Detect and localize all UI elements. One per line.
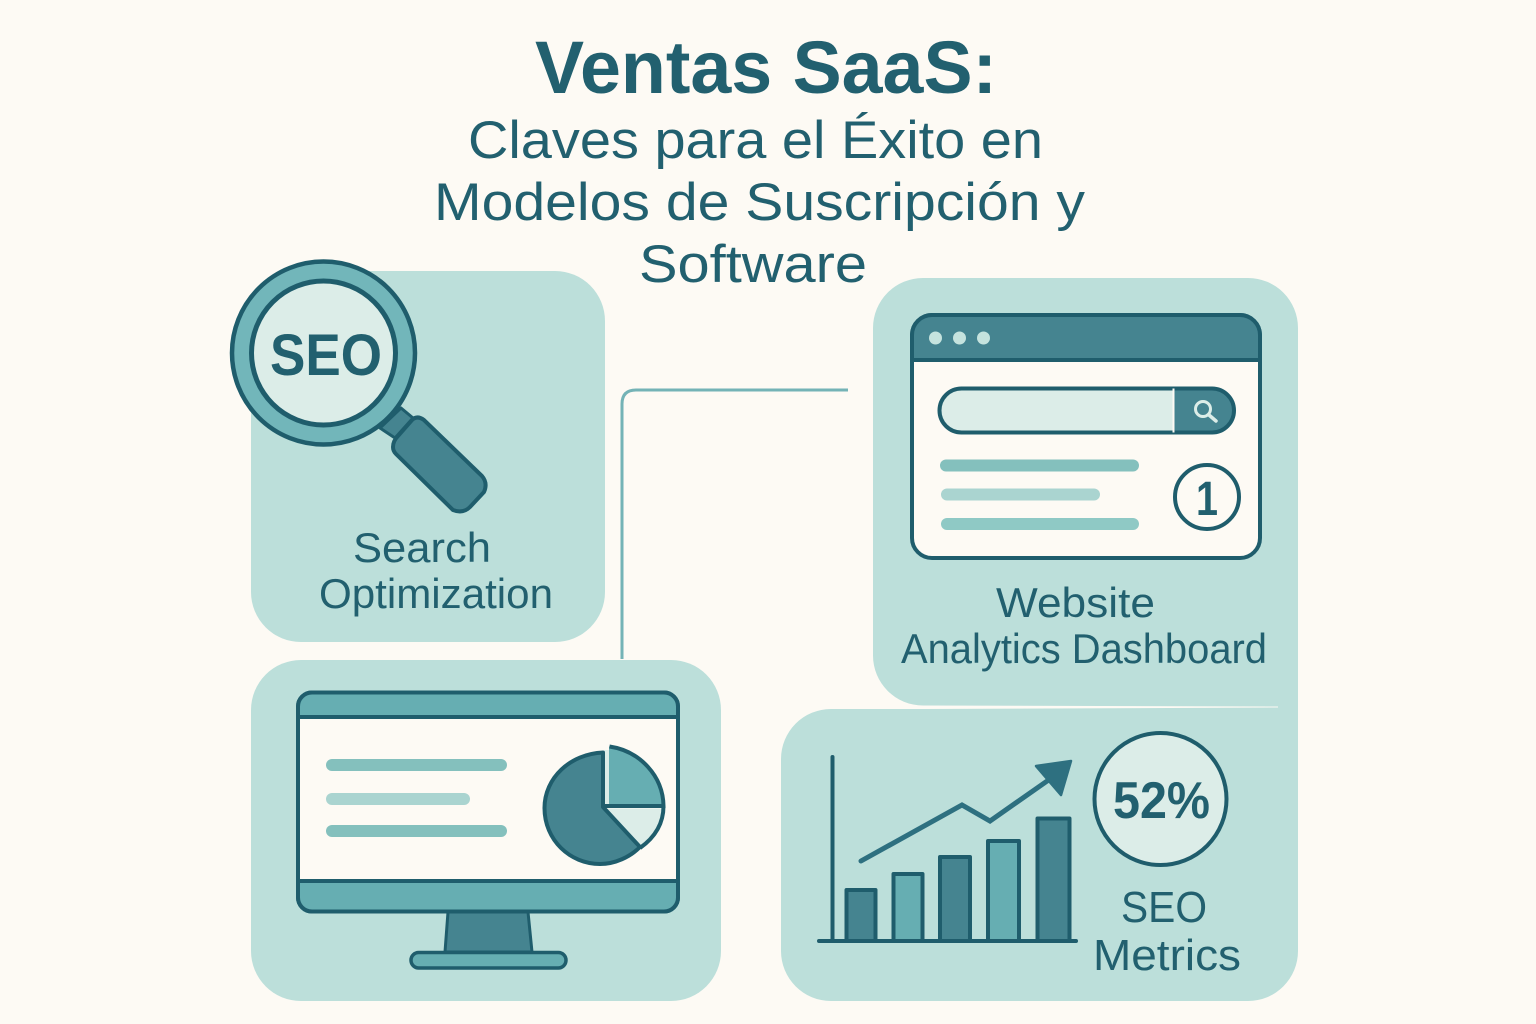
arrow: upward trend [861, 761, 1071, 861]
label: search optimization: Optimization [319, 570, 553, 617]
search bar [940, 388, 1234, 432]
label: search optimization [319, 524, 553, 617]
icon: SEO magnifying glass: SEO [270, 323, 382, 388]
title: Modelos de Suscripción y [434, 173, 1086, 232]
label: website analytics dashboard [901, 579, 1267, 672]
result lines [940, 460, 1139, 530]
metric badge: 52% [1094, 733, 1226, 865]
rank badge: 1: 1 [1196, 473, 1218, 526]
pie chart [544, 746, 664, 864]
metric badge: 52%: 52% [1113, 772, 1210, 830]
title: Claves para el Éxito en [468, 111, 1043, 170]
label: search optimization: Search [353, 524, 491, 571]
title: Software [639, 235, 867, 294]
title [434, 26, 1086, 294]
panel: SEO metrics [781, 708, 1298, 1001]
label: SEO metrics [1093, 883, 1241, 980]
connector line [622, 390, 848, 659]
icon: browser window [912, 315, 1260, 558]
label: website analytics dashboard: Analytics Dashboard [901, 625, 1267, 672]
bar chart [819, 757, 1076, 941]
rank badge: 1 [1175, 465, 1239, 529]
label: SEO metrics: SEO [1121, 883, 1207, 932]
text lines [326, 759, 507, 837]
panel: search optimization [232, 262, 605, 642]
label: SEO metrics: Metrics [1093, 931, 1241, 980]
panel: website analytics dashboard [873, 278, 1298, 712]
label: website analytics dashboard: Website [996, 579, 1155, 626]
title: Ventas SaaS: [535, 26, 997, 109]
icon: SEO magnifying glass [232, 262, 486, 511]
icon: desktop monitor [298, 692, 678, 968]
panel: monitor [251, 660, 721, 1001]
